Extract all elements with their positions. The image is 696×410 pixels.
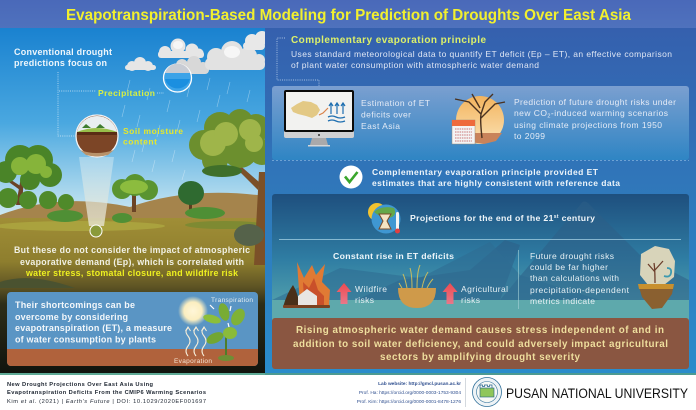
panel: methods (272, 86, 689, 160)
text: atmospheric evaporative demand: evaporative demand (Ep), which is correlated with (20, 257, 244, 267)
rain (122, 78, 250, 180)
text: prediction: new CO (514, 108, 668, 120)
text: shortcomings: overcome by considering (15, 312, 128, 322)
beam of light (79, 157, 114, 226)
label: soil moisture content: Soil moisture (123, 126, 183, 136)
text: future drought risks: could be far higher (530, 262, 608, 272)
text: shortcomings: of water consumption by plants (15, 334, 156, 344)
heading: end of century projections: century (559, 213, 595, 223)
dotted connectors (58, 72, 164, 136)
text: future drought risks: precipitation-dependent (530, 285, 630, 295)
heading: complementary evaporation principle (277, 35, 486, 86)
text: conclusion: Rising atmospheric water demand causes stress independent of and in (296, 325, 664, 336)
text: shortcomings: evapotranspiration (ET), a measure (15, 323, 172, 333)
text: estimation: East Asia (361, 121, 400, 131)
icon: drought tree and calendar (452, 94, 505, 144)
icon: soil magnifier (76, 115, 118, 157)
text: links: Prof. Ha: https://orcid.org/0000-0003-1753-9304 (359, 390, 461, 396)
panel: right background (265, 28, 696, 374)
label: transpiration: Transpiration (211, 297, 253, 304)
text: links: Lab website: http://gmcl.pusan.ac.kr (378, 381, 461, 387)
heading: end of century projections: Projections for the end of the 21 (410, 213, 553, 223)
text: future drought risks: metrics indicate (530, 296, 595, 306)
text: prediction: -induced warming scenarios (551, 108, 668, 118)
text: prediction: 2 (547, 114, 550, 120)
text: consistency result: estimates that are highly consistent with reference data (372, 178, 620, 188)
panel: conclusion (272, 318, 689, 369)
text: conventional predictions: Conventional drought (14, 47, 112, 57)
text: agricultural risks: risks (461, 295, 480, 305)
clouds (125, 31, 269, 74)
text: future drought risks: than calculations with (530, 273, 619, 283)
panel: projections (272, 194, 689, 324)
text: citation: Evapotranspiration Deficits From the CMIP6 Warming Scenarios (7, 390, 206, 396)
hills (0, 193, 265, 240)
icon: globe, hourglass, sun, thermometer (368, 203, 400, 234)
text: wildfire risks: risks (355, 295, 374, 305)
text: consistency result: Complementary evaporation principle provided ET (372, 167, 599, 177)
heading: constant rise: Constant rise in ET deficits (333, 251, 454, 261)
text: conclusion: sectors by amplifying drought severity (380, 352, 581, 363)
heading: end of century projections: st (554, 214, 559, 220)
icon: evaporation arrows (186, 327, 206, 356)
text: prediction: to 2099 (514, 131, 545, 141)
icon: university seal (472, 378, 502, 406)
text: prediction: Prediction of future drought risks under (514, 97, 676, 107)
trees and bushes (0, 109, 275, 288)
text: principle description: Uses standard meteorological data to quantify ET deficit (Ep – ET), an effective comparison (291, 49, 672, 59)
text: conventional predictions: predictions focus on (14, 58, 107, 68)
text: links: Prof. Kim: https://orcid.org/0000-0001-8478-1276 (357, 399, 461, 405)
text: prediction: using climate projections from 1950 (514, 120, 662, 130)
icon: plant (202, 302, 248, 361)
text: citation: New Drought Projections Over East Asia Using (7, 382, 154, 388)
text: principle description: of plant water consumption with atmospheric water demand (291, 60, 539, 70)
heading: complementary evaporation principle: Complementary evaporation principle (291, 35, 486, 46)
label: soil moisture content: content (123, 136, 157, 146)
text: conclusion: addition to soil water deficiency, and could adversely impact agricultural (293, 339, 668, 350)
arrow: agricultural risk up (442, 283, 458, 304)
icon: burning house (283, 262, 330, 308)
icon: check mark (340, 166, 362, 188)
text: atmospheric evaporative demand: water stress, stomatal closure, and wildfire risk (25, 268, 238, 278)
panel: evapotranspiration box (7, 292, 258, 366)
ground (0, 218, 265, 374)
icon: monitor with East Asia map (284, 90, 354, 146)
label: precipitation: Precipitation (98, 88, 155, 98)
text: atmospheric evaporative demand: But these do not consider the impact of atmospheric (14, 245, 250, 255)
text: future drought risks: Future drought risks (530, 251, 614, 261)
mountains (330, 202, 689, 312)
text: estimation: deficits over (361, 110, 411, 120)
icon: rain magnifier (164, 64, 192, 92)
title bar: Evapotranspiration-Based Modeling for Prediction of Droughts Over East Asia (66, 7, 631, 24)
text: citation: Kim et al. (2021) | Earth's Future | DOI: 10.1029/2020EF001697 (7, 399, 206, 405)
panel: footer (0, 373, 696, 410)
text: agricultural risks: Agricultural (461, 284, 508, 294)
icon: dry grass in soil (398, 265, 436, 308)
text: estimation: Estimation of ET (361, 98, 430, 108)
text: wildfire risks: Wildfire (355, 284, 387, 294)
arrow: wildfire risk up (336, 283, 352, 304)
label: evaporation: Evaporation (174, 358, 212, 365)
icon: sun (178, 296, 208, 326)
icon: tree on floating soil (638, 246, 675, 309)
panel: left scene (0, 28, 275, 374)
text: shortcomings: Their shortcomings can be (15, 300, 135, 310)
divider (272, 160, 689, 162)
title bar (0, 0, 696, 28)
